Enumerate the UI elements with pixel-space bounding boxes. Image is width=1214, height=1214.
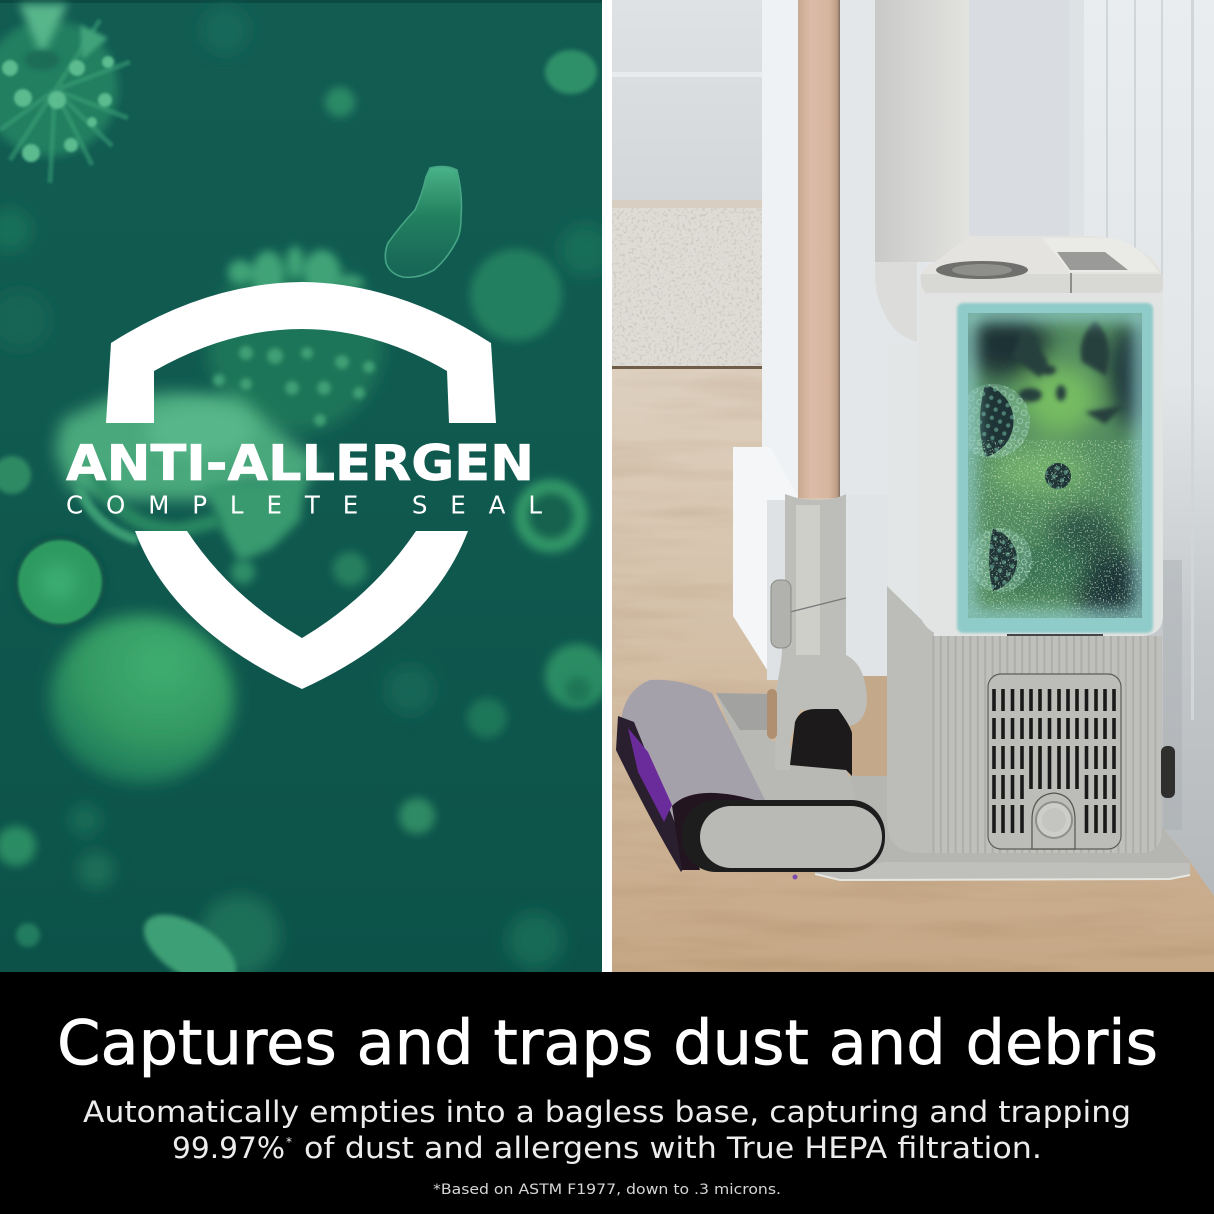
dock lid bbox=[921, 236, 1163, 293]
floor head nozzle bbox=[616, 680, 885, 880]
icon: bacterium bbox=[385, 166, 462, 277]
divider bbox=[602, 0, 612, 972]
body text: * bbox=[286, 1135, 292, 1149]
icon: blurred spheres top bbox=[325, 50, 597, 341]
icon: bright central allergen blob bbox=[55, 392, 367, 586]
icon: large virus cluster behind shield bbox=[207, 246, 383, 433]
body text: Automatically empties into a bagless base, capturing and trapping bbox=[83, 1095, 1131, 1129]
dust bin window bbox=[956, 303, 1163, 633]
icon: spiky dust mites bbox=[968, 384, 1071, 592]
panel: green allergen background bbox=[0, 0, 611, 1000]
headline: Captures and traps dust and debris bbox=[57, 1007, 1158, 1079]
suction tube bbox=[875, 0, 969, 342]
dust crevices bbox=[1012, 320, 1125, 424]
brush roll cover bbox=[622, 680, 765, 822]
logo: anti-allergen shield bbox=[66, 282, 542, 689]
floor bbox=[612, 368, 1214, 972]
icon: foreground spheres bbox=[0, 456, 609, 1000]
wand joint bbox=[767, 494, 867, 776]
dock side bbox=[887, 586, 934, 776]
faint background spheres bbox=[0, 6, 611, 975]
heading: anti-allergen: ANTI-ALLERGEN bbox=[66, 435, 534, 492]
vent grille bbox=[988, 674, 1121, 849]
icon: spiky virus top left bbox=[0, 4, 130, 183]
shield bottom chevron bbox=[135, 531, 468, 689]
shield top arc bbox=[106, 282, 496, 423]
rug bbox=[612, 200, 762, 369]
subheading: complete seal: COMPLETE SEAL bbox=[66, 490, 542, 520]
grille knob bbox=[1032, 793, 1075, 849]
body text bbox=[83, 1095, 1131, 1165]
dock upper body bbox=[919, 285, 1163, 636]
back wall and window bbox=[612, 0, 1214, 896]
dark vignette shapes bbox=[968, 313, 1142, 618]
nozzle end cap bbox=[682, 800, 885, 872]
dock lower base with ribs bbox=[932, 634, 1162, 853]
door trim and skirting bbox=[733, 0, 889, 780]
body text: of dust and allergens with True HEPA filtration. bbox=[304, 1131, 1042, 1165]
wand bbox=[798, 0, 840, 498]
dock side knob bbox=[1161, 746, 1175, 798]
body text: 99.97% bbox=[172, 1131, 285, 1165]
dock base plate bbox=[815, 776, 1190, 881]
footnote: *Based on ASTM F1977, down to .3 microns. bbox=[433, 1182, 781, 1198]
dust speckles bbox=[968, 440, 1142, 618]
panel: vacuum photo bbox=[612, 0, 1214, 972]
